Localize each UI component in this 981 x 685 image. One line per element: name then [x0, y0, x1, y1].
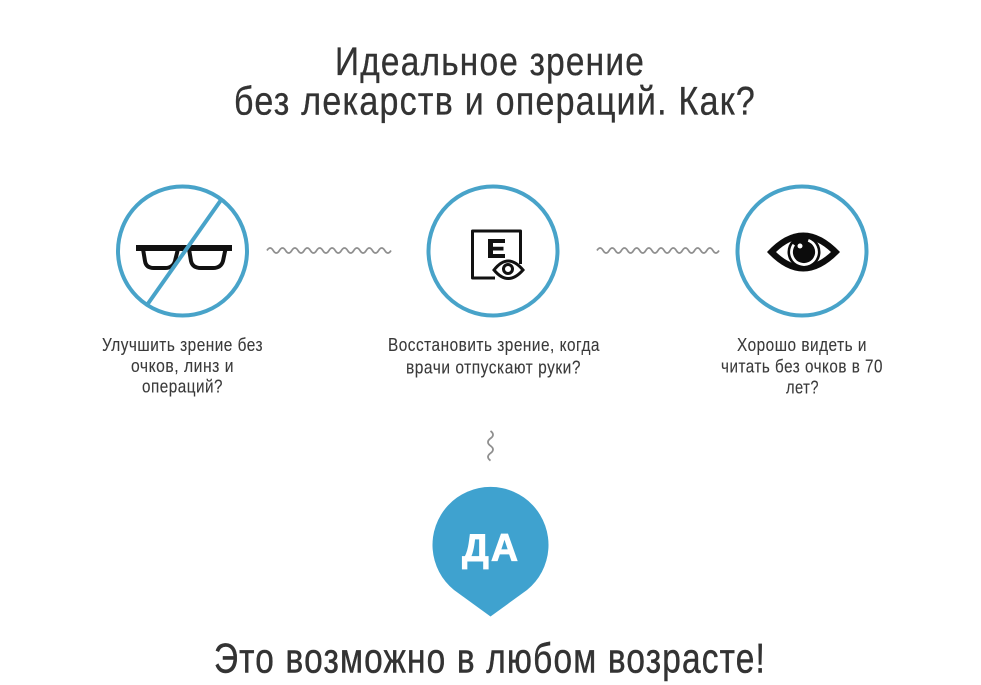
icon: eye: [738, 186, 866, 316]
caption 2: [388, 335, 600, 378]
caption 2: Восстановить зрение, когда: [388, 335, 600, 355]
closing statement: Это возможно в любом возрасте!: [214, 634, 766, 682]
caption 2: врачи отпускают руки?: [406, 358, 581, 378]
title: [234, 40, 756, 124]
caption 3: читать без очков в 70: [721, 356, 883, 376]
wavy connector 2: [597, 248, 719, 253]
wavy connector 1: [267, 248, 391, 253]
wavy connector vertical: [488, 431, 493, 461]
caption 3: Хорошо видеть и: [737, 335, 867, 355]
caption 1: очков, линз и: [131, 356, 234, 376]
caption 1: операций?: [142, 376, 223, 396]
badge: yes: ДА: [462, 527, 520, 570]
icon: eye chart: [428, 186, 558, 316]
icon: crossed-out glasses: [118, 186, 247, 316]
badge: yes: [432, 487, 548, 616]
caption 3: лет?: [786, 378, 819, 398]
title: без лекарств и операций. Как?: [234, 80, 756, 124]
title: Идеальное зрение: [335, 40, 645, 84]
caption 1: [102, 335, 263, 396]
caption 1: Улучшить зрение без: [102, 335, 263, 355]
caption 3: [721, 335, 883, 398]
